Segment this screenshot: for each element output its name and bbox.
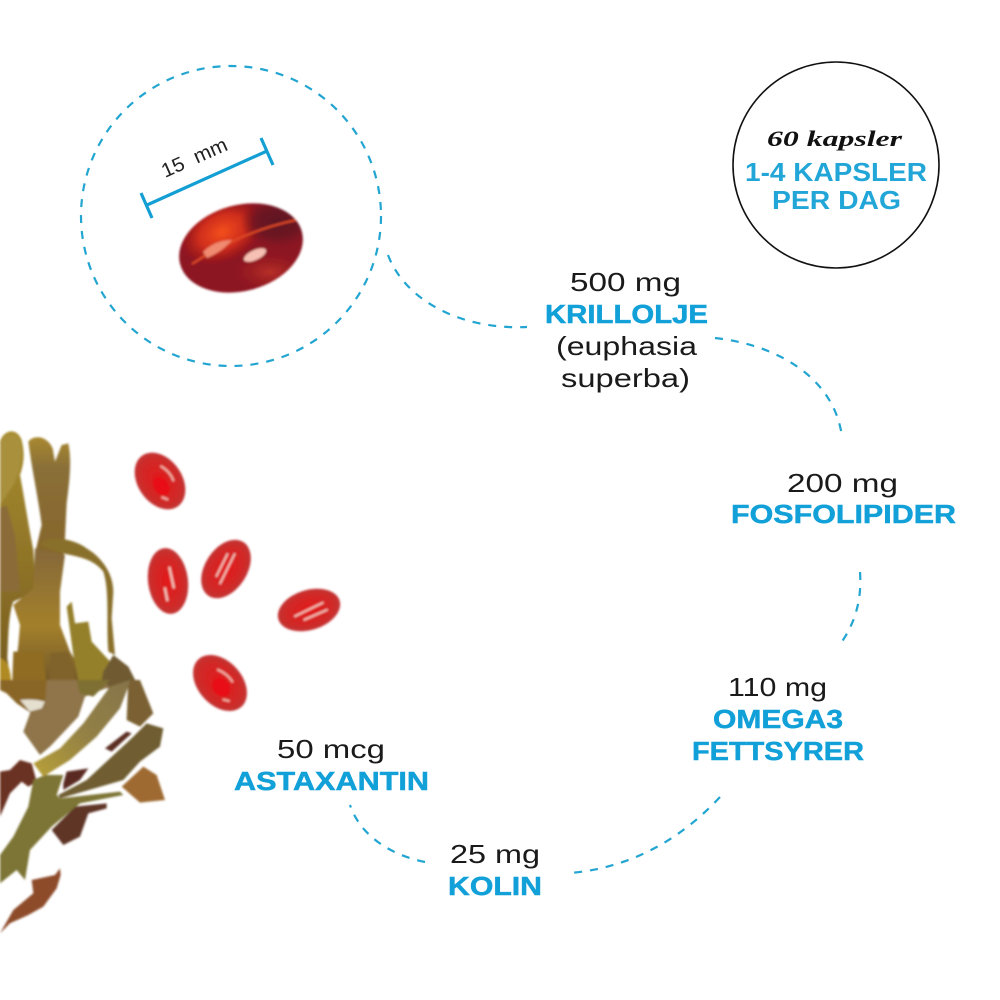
krill oil: (euphasia <box>556 331 698 361</box>
capsule 1 <box>124 443 196 519</box>
capsule 4 <box>273 582 345 638</box>
badge <box>733 62 939 268</box>
choline: 25 mg <box>450 839 540 869</box>
seaweed: lower stems <box>0 680 165 933</box>
size measure <box>141 134 273 218</box>
badge: capsule count: 60 kapsler <box>767 126 903 151</box>
krill oil: KRILLOLJE <box>545 299 708 329</box>
omega3: 110 mg <box>728 672 827 702</box>
capsule 3 <box>191 531 261 607</box>
badge: dosage: PER DAG <box>772 185 901 215</box>
badge: dosage <box>745 157 927 215</box>
phospholipids <box>731 468 956 529</box>
krill oil <box>545 267 708 393</box>
size label: 15 mm <box>158 134 231 183</box>
choline: KOLIN <box>448 871 542 901</box>
astaxanthin <box>234 734 429 796</box>
phospholipids: 200 mg <box>787 468 898 498</box>
capsules group <box>124 443 345 722</box>
capsule 5 <box>182 644 258 722</box>
phospholipids: FOSFOLIPIDER <box>731 499 956 529</box>
seaweed: upper fronds <box>0 431 139 688</box>
capsule 2 <box>144 546 192 616</box>
omega3: OMEGA3 <box>713 704 843 734</box>
badge: dosage: 1-4 KAPSLER <box>745 157 927 187</box>
seaweed <box>0 431 165 933</box>
krill oil: 500 mg <box>570 267 681 297</box>
main capsule <box>177 202 305 294</box>
dashed circle <box>81 66 381 366</box>
choline <box>448 839 542 901</box>
dashed connectors <box>350 255 860 873</box>
omega3 <box>692 672 864 766</box>
astaxanthin: 50 mcg <box>277 734 385 764</box>
omega3: FETTSYRER <box>692 736 864 766</box>
astaxanthin: ASTAXANTIN <box>234 766 429 796</box>
krill oil: superba) <box>561 363 690 393</box>
